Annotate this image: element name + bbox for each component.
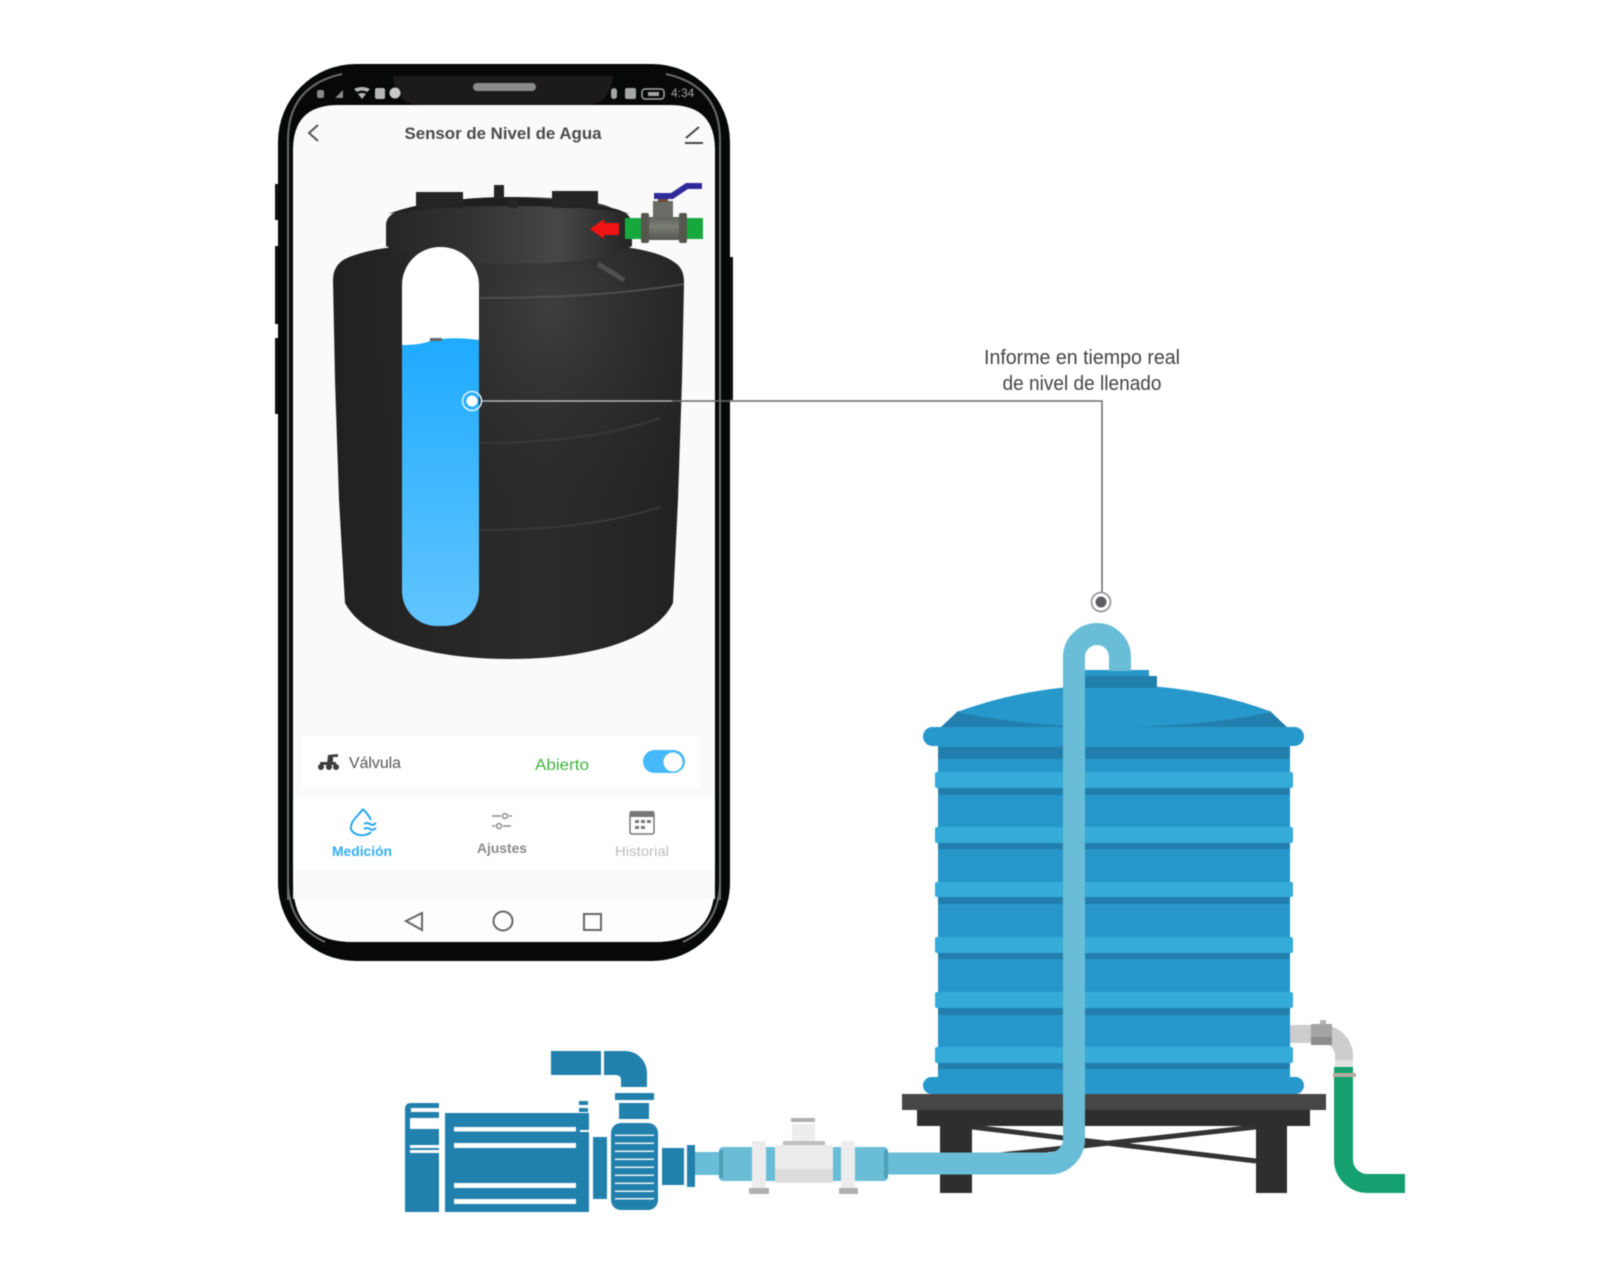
platform	[902, 1094, 1326, 1193]
phone body	[278, 64, 730, 961]
marker above real tank	[1092, 592, 1110, 612]
grey elbow	[1290, 1034, 1344, 1062]
volute	[611, 1123, 658, 1210]
neck and flange	[619, 1103, 649, 1119]
riser pipe	[880, 634, 1120, 1164]
callout text: Informe en tiempo real	[984, 347, 1180, 369]
valve label: Válvula	[349, 755, 401, 772]
system bar background	[293, 882, 715, 942]
bottom rim	[923, 1077, 1304, 1094]
tank lid	[923, 670, 1304, 746]
speaker	[473, 83, 536, 91]
level tube	[402, 247, 479, 626]
medicion label: Medición	[332, 843, 392, 859]
pump	[405, 1051, 695, 1212]
tank hoops	[935, 747, 1293, 1069]
side buttons	[275, 184, 733, 414]
blue water tank	[902, 670, 1326, 1193]
tank lid	[386, 197, 632, 264]
discharge elbow	[551, 1051, 601, 1075]
screen	[293, 105, 715, 942]
icon: calendar	[630, 811, 654, 834]
edit icon	[685, 127, 703, 143]
coupling	[593, 1137, 607, 1199]
status open: Abierto	[535, 757, 589, 774]
toggle	[643, 750, 685, 773]
water level	[402, 338, 479, 626]
red arrow	[590, 219, 619, 239]
motor body	[445, 1113, 589, 1212]
outlet flange	[662, 1148, 684, 1185]
tank body	[333, 247, 684, 659]
status icons left	[317, 87, 400, 99]
icon: drop	[351, 809, 376, 835]
black water tank	[333, 185, 684, 659]
callout text: de nivel de llenado	[1002, 373, 1162, 395]
outlet pipe	[1290, 1020, 1405, 1184]
bottom navigation	[293, 798, 715, 870]
ajustes label: Ajustes	[477, 840, 527, 856]
lid caps	[416, 185, 598, 208]
motor fins	[579, 1101, 588, 1105]
back chevron	[309, 125, 318, 141]
historial label: Historial	[615, 843, 669, 859]
valve clamps	[752, 1141, 766, 1188]
valve row	[302, 736, 700, 788]
status icons right	[611, 88, 664, 99]
notch	[393, 76, 613, 105]
tank body	[938, 746, 1290, 1078]
icon: sliders	[492, 814, 512, 828]
system navigation	[406, 912, 601, 930]
inline valve	[695, 1118, 888, 1194]
tank ridges	[480, 264, 684, 530]
motor shroud	[405, 1103, 439, 1212]
screen title: Sensor de Nivel de Agua	[404, 124, 602, 143]
status time: 4:34	[671, 86, 695, 100]
tank marker on phone	[462, 392, 482, 410]
faucet icon	[318, 754, 339, 770]
green pipe	[1344, 1067, 1405, 1184]
phone	[275, 64, 733, 961]
valve on tank	[625, 186, 703, 243]
callout text	[984, 347, 1180, 395]
valve body	[775, 1145, 833, 1183]
callout leader line	[482, 401, 1102, 592]
